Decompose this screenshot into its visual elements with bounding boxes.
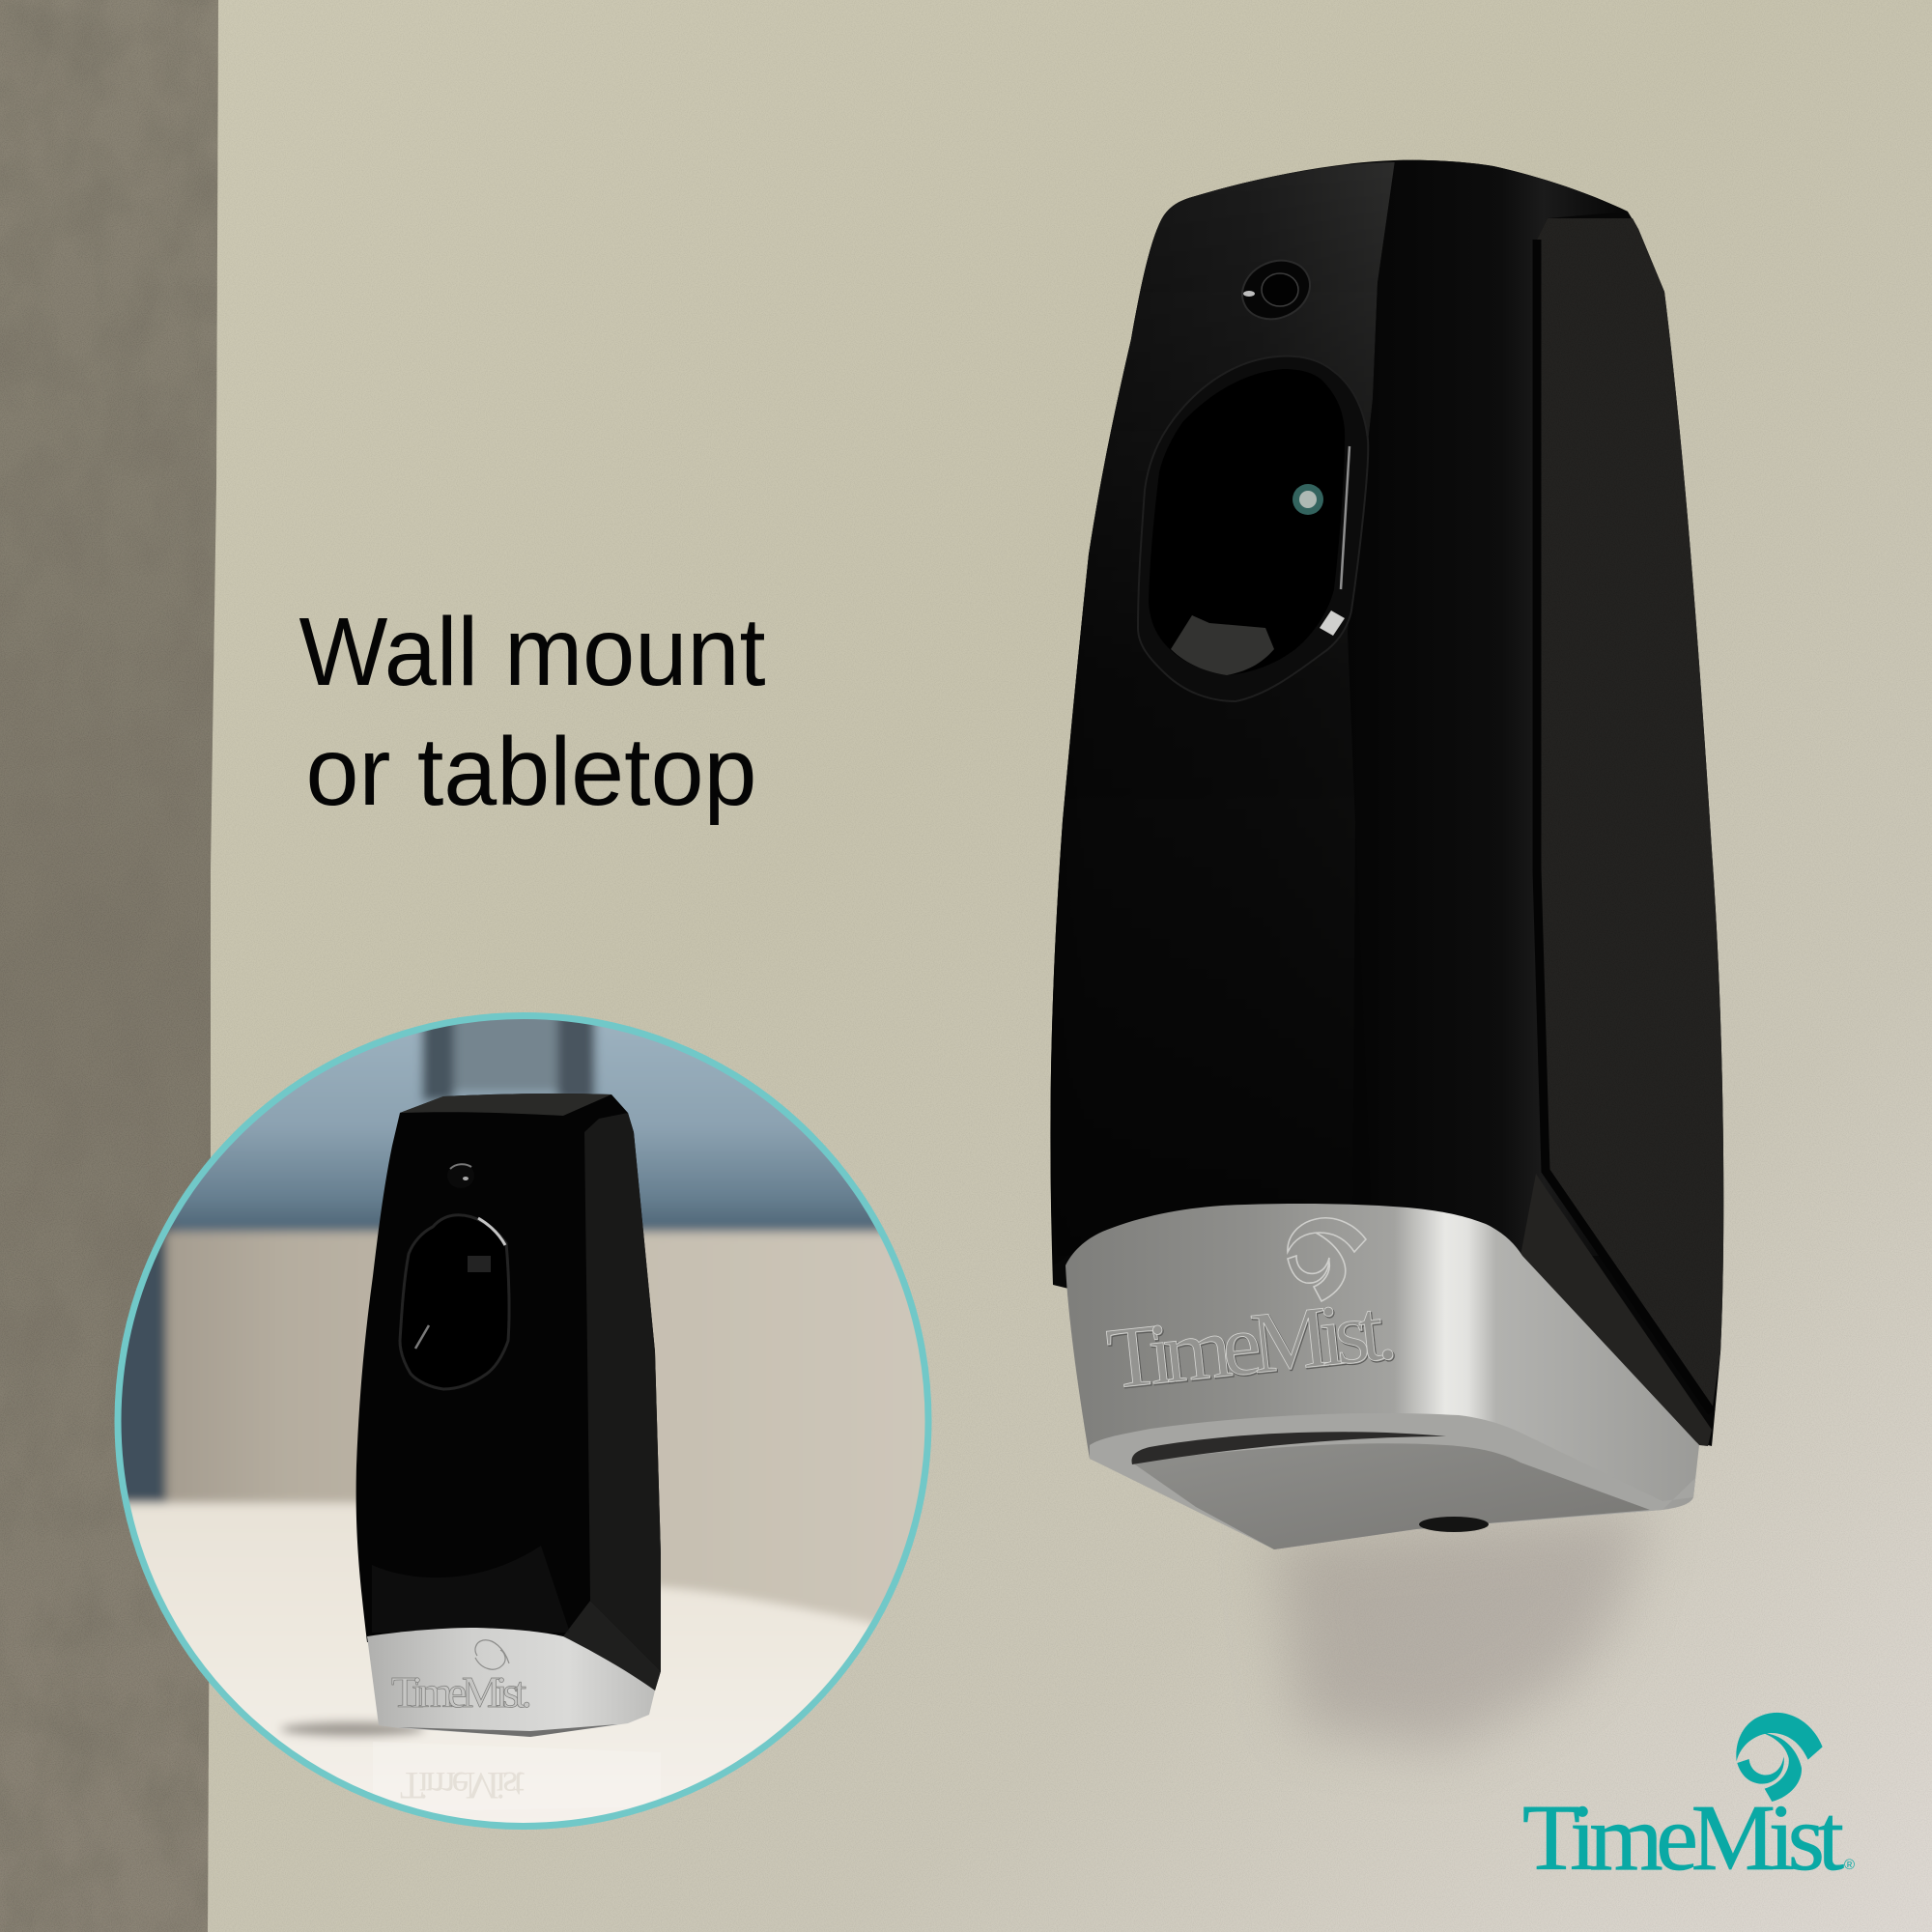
base sensor notch — [1419, 1517, 1489, 1532]
side panel groove — [1537, 240, 1712, 1412]
base front — [1065, 1204, 1699, 1549]
tabletop base shadow — [398, 1724, 618, 1737]
inset scene — [122, 1019, 925, 1823]
oval window — [1138, 356, 1368, 701]
tabletop window — [400, 1215, 509, 1389]
tabletop nozzle — [447, 1163, 474, 1188]
wall mounted dispenser — [1050, 160, 1723, 1549]
dispenser body silhouette — [1050, 160, 1723, 1446]
base chamfer — [1090, 1413, 1695, 1549]
base underside — [1132, 1443, 1650, 1549]
tabletop lower wing — [563, 1601, 661, 1690]
sheen on glossy face — [1082, 162, 1395, 679]
tabletop top face — [400, 1094, 611, 1116]
silver base — [1065, 1204, 1699, 1549]
embossed brand name: TimeMist. — [1103, 1282, 1401, 1407]
window inner — [1149, 369, 1345, 675]
tabletop sheen — [372, 1546, 570, 1633]
tabletop embossed brand name: TimeMist. — [391, 1667, 532, 1717]
heading text: or tabletop — [305, 718, 757, 826]
window rim — [1138, 356, 1368, 701]
lower wing panel — [1520, 1174, 1712, 1446]
embossed swirl — [1288, 1218, 1366, 1301]
glossy front face — [1050, 162, 1395, 1265]
spray nozzle hole — [1233, 250, 1320, 329]
window rim highlight — [1341, 446, 1350, 589]
logo swirl — [1736, 1713, 1823, 1802]
tabletop silver base — [367, 1628, 655, 1737]
tabletop side panel — [584, 1113, 661, 1671]
concrete pillar — [0, 0, 218, 1932]
tabletop dispenser — [356, 1094, 661, 1737]
TimeMist logo — [1522, 1713, 1855, 1890]
window reflection — [1171, 615, 1274, 675]
right textured side panel — [1537, 218, 1723, 1412]
heading text: Wall mount — [299, 598, 766, 706]
tabletop dispenser body — [356, 1094, 661, 1690]
logo wordmark: TimeMist — [1522, 1786, 1844, 1890]
inset reflection on table: TimeMist — [400, 1764, 525, 1807]
centre body band — [1348, 160, 1628, 1256]
embossed brand name: TimeMist. — [1104, 1283, 1403, 1408]
tabletop embossed swirl — [475, 1640, 509, 1669]
logo registered mark: ® — [1844, 1857, 1855, 1873]
base slot — [1132, 1432, 1446, 1464]
heading text — [299, 598, 766, 826]
shadow cast below wall dispenser — [1273, 1507, 1652, 1748]
circle inset: tabletop dispenser — [114, 1012, 931, 1830]
indicator light — [1293, 484, 1323, 515]
circle teal border — [118, 1016, 928, 1826]
